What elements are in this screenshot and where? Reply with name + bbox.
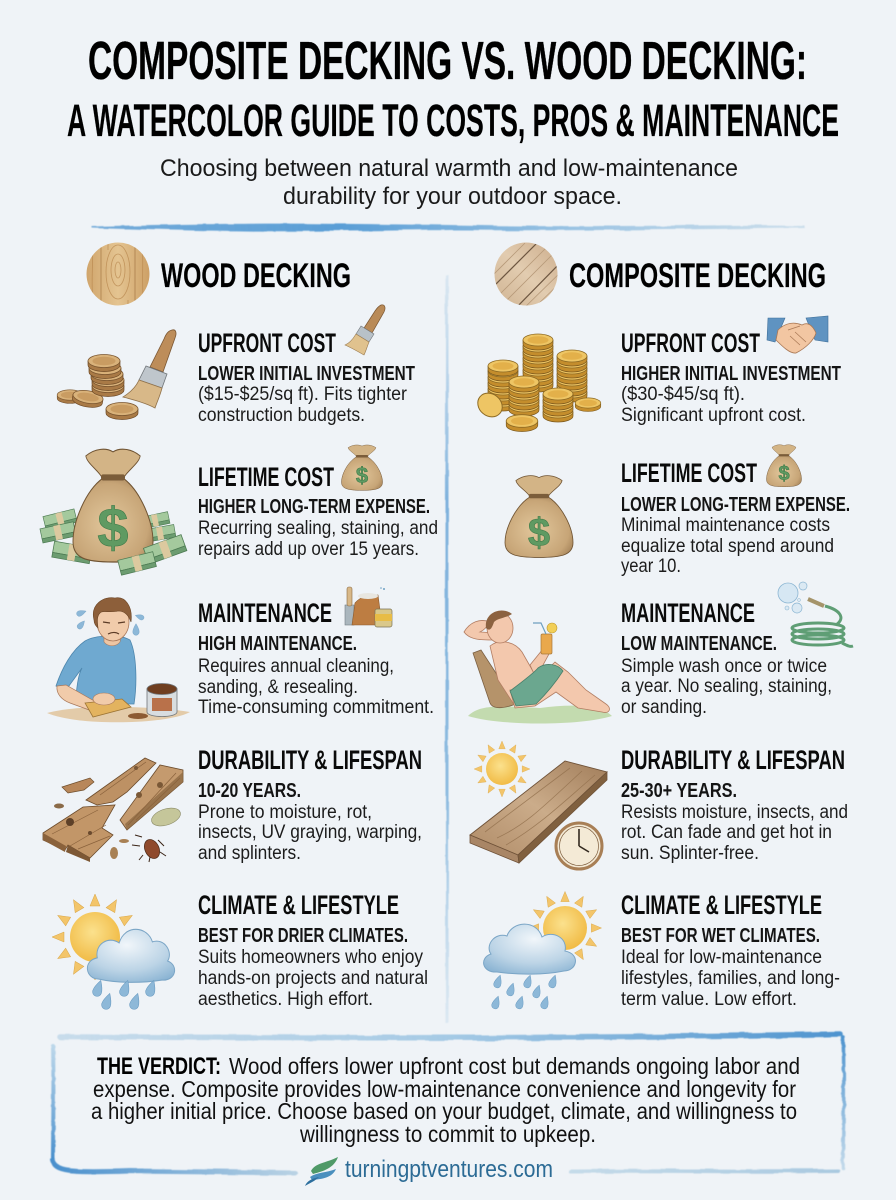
text: wood maintenance: Requires annual cleaning,	[198, 656, 394, 677]
icon: composite board, sun and clock	[470, 741, 607, 869]
icon: stain supplies	[345, 587, 392, 627]
text: composite durability: rot. Can fade and get hot in	[621, 822, 832, 843]
logo: turningptventures	[305, 1156, 553, 1186]
heading: maintenance: MAINTENANCE	[198, 598, 332, 628]
text: wood maintenance: HIGH MAINTENANCE.	[198, 633, 357, 655]
row: upfront cost	[473, 316, 841, 432]
text: composite lifetime cost: equalize total spend around	[621, 536, 834, 557]
icon: small paintbrush	[345, 305, 385, 355]
verdict text: a higher initial price. Choose based on your budget, climate, and willingness to	[91, 1098, 797, 1124]
text: wood climate: hands-on projects and natural	[198, 968, 428, 989]
icon: wood swatch	[86, 240, 150, 310]
text: wood climate: BEST FOR DRIER CLIMATES.	[198, 925, 408, 947]
text: composite climate: Ideal for low-maintenance	[621, 947, 822, 968]
text: composite durability: Resists moisture, insects, and	[621, 802, 848, 823]
text: composite climate	[621, 925, 840, 1010]
row: climate and lifestyle	[484, 890, 840, 1010]
text: composite lifetime cost	[621, 494, 850, 577]
text: wood climate	[198, 925, 428, 1010]
panel: verdict	[53, 1034, 844, 1186]
logo text: turningptventures.com	[345, 1156, 553, 1183]
text: composite upfront cost	[621, 363, 841, 426]
text: wood durability	[198, 780, 422, 864]
verdict watercolor frame	[53, 1034, 844, 1173]
icon: small money bag	[342, 445, 382, 490]
icon: money bag with cash	[40, 449, 187, 575]
verdict text: Wood offers lower upfront cost but demands ongoing labor and	[229, 1053, 800, 1079]
text: wood upfront cost	[198, 363, 415, 426]
icon: coins and paintbrush	[57, 330, 176, 420]
text: composite durability: sun. Splinter-free.	[621, 843, 759, 864]
icon: gold coin stacks	[473, 334, 601, 432]
text: wood upfront cost: LOWER INITIAL INVESTMENT	[198, 363, 415, 385]
heading: upfront cost: UPFRONT COST	[621, 328, 760, 358]
panel: composite decking column	[464, 240, 853, 1010]
icon: tired man sanding	[47, 598, 190, 722]
icon: money bag with cash: $	[97, 496, 129, 559]
title	[67, 31, 839, 146]
row: upfront cost	[57, 305, 415, 426]
text: composite upfront cost: ($30-$45/sq ft).	[621, 384, 745, 405]
text: wood lifetime cost: HIGHER LONG-TERM EXPENSE.	[198, 496, 430, 518]
text: wood upfront cost: construction budgets.	[198, 405, 365, 426]
text: wood maintenance	[198, 633, 434, 718]
subtitle: durability for your outdoor space.	[283, 183, 622, 210]
verdict text	[91, 1053, 800, 1147]
heading: lifetime cost: LIFETIME COST	[621, 458, 757, 488]
row: durability and lifespan	[470, 741, 848, 869]
text: composite lifetime cost: year 10.	[621, 556, 681, 577]
text: composite maintenance: a year. No sealing, staining,	[621, 676, 832, 697]
text: wood durability: and splinters.	[198, 843, 301, 864]
row: lifetime cost	[505, 445, 850, 577]
icon: sun, rain cloud and drops	[484, 891, 602, 1010]
icon: small money bag	[766, 445, 802, 487]
text: wood maintenance: Time-consuming commitment.	[198, 697, 434, 718]
icon: composite swatch	[494, 242, 558, 306]
icon: small money bag: $	[778, 463, 790, 485]
row: maintenance	[47, 587, 434, 722]
text: composite climate: lifestyles, families, and long-	[621, 968, 840, 989]
text: composite maintenance	[621, 633, 832, 718]
text: wood lifetime cost: Recurring sealing, staining, and	[198, 518, 438, 539]
text: composite maintenance: or sanding.	[621, 697, 707, 718]
row: lifetime cost	[40, 445, 438, 575]
verdict text: expense. Composite provides low-maintenance convenience and longevity for	[93, 1076, 796, 1102]
text: wood climate: aesthetics. High effort.	[198, 989, 373, 1010]
icon: logo swoosh	[305, 1157, 338, 1186]
icon: money bag	[505, 476, 573, 557]
heading: durability: DURABILITY & LIFESPAN	[198, 745, 422, 775]
text: wood durability: 10-20 YEARS.	[198, 780, 301, 802]
text: composite maintenance: Simple wash once or twice	[621, 656, 827, 677]
heading: lifetime cost: LIFETIME COST	[198, 462, 334, 492]
subtitle: Choosing between natural warmth and low-maintenance	[160, 155, 738, 182]
verdict text: THE VERDICT:	[97, 1053, 221, 1080]
text: composite maintenance: LOW MAINTENANCE.	[621, 633, 777, 655]
heading: climate: CLIMATE & LIFESTYLE	[198, 890, 399, 920]
row: climate and lifestyle	[52, 890, 428, 1011]
icon: small money bag: $	[356, 463, 368, 488]
icon: relaxing man with drink	[464, 610, 612, 724]
vertical column divider	[446, 275, 448, 1023]
watercolor divider	[92, 224, 805, 231]
heading: maintenance: MAINTENANCE	[621, 598, 755, 628]
text: composite durability	[621, 780, 848, 864]
text: wood lifetime cost	[198, 496, 438, 560]
text: wood durability: insects, UV graying, warping,	[198, 822, 422, 843]
heading: wood decking: WOOD DECKING	[161, 257, 351, 295]
icon: money bag: $	[528, 511, 550, 555]
text: composite durability: 25-30+ YEARS.	[621, 780, 737, 802]
icon: garden hose and bubbles	[778, 582, 853, 646]
text: wood lifetime cost: repairs add up over 15 years.	[198, 539, 419, 560]
icon: broken wood planks and beetle	[43, 758, 183, 862]
verdict text: willingness to commit to upkeep.	[299, 1121, 596, 1147]
text: composite climate: BEST FOR WET CLIMATES.	[621, 925, 820, 947]
subtitle	[160, 155, 738, 210]
text: wood durability: Prone to moisture, rot,	[198, 802, 372, 823]
text: wood climate: Suits homeowners who enjoy	[198, 947, 423, 968]
text: composite climate: term value. Low effort.	[621, 989, 797, 1010]
text: wood upfront cost: ($15-$25/sq ft). Fits tighter	[198, 384, 408, 405]
icon: sun, cloud and rain	[52, 894, 175, 1011]
text: composite upfront cost: Significant upfront cost.	[621, 405, 806, 426]
heading: upfront cost: UPFRONT COST	[198, 328, 336, 358]
text: composite lifetime cost: Minimal maintenance costs	[621, 515, 830, 536]
row: durability and lifespan	[43, 745, 422, 864]
row: maintenance	[464, 582, 853, 724]
text: wood maintenance: sanding, & resealing.	[198, 677, 358, 698]
panel: wood decking column	[40, 240, 438, 1011]
icon: handshake	[767, 316, 828, 353]
